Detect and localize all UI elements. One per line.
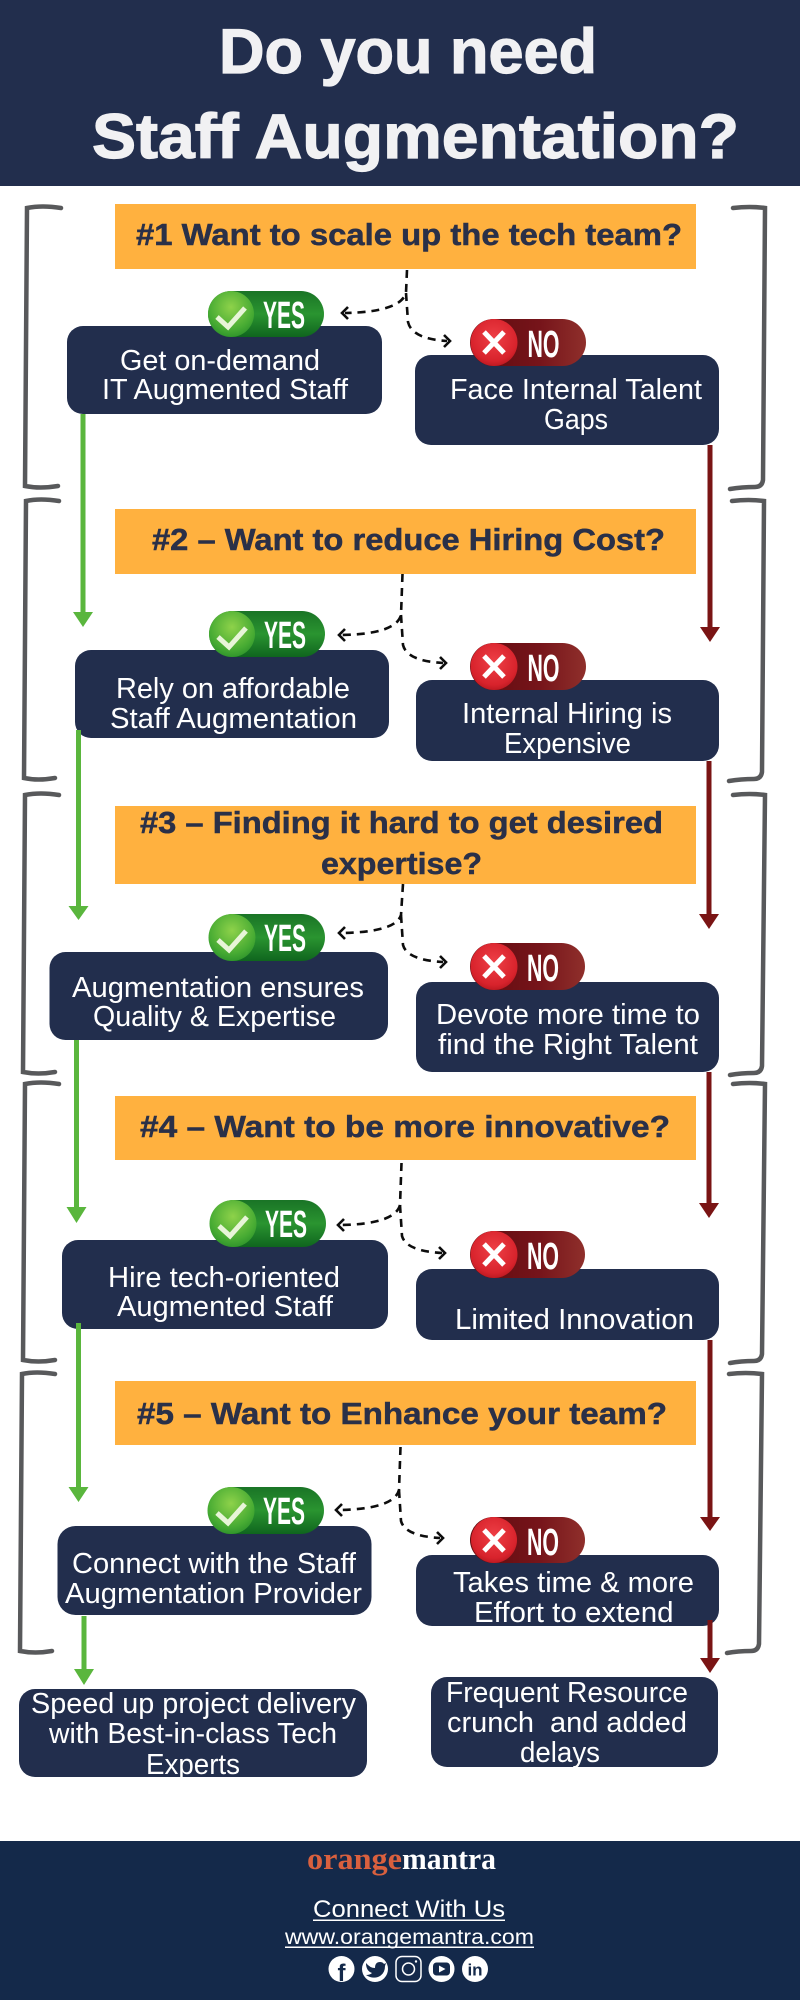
no answer box: Takes time & more: [453, 1567, 694, 1599]
panel: question 1: [25, 204, 765, 642]
no pill: [470, 1231, 585, 1278]
icon: linkedin: in: [467, 1960, 483, 1980]
red arrow: [700, 1340, 720, 1531]
no answer box: Expensive: [504, 728, 631, 760]
icon: twitter: [362, 1956, 388, 1982]
yes answer box: Staff Augmentation: [110, 703, 357, 735]
panel: question 4: [23, 1082, 765, 1531]
no pill: NO: [527, 948, 559, 990]
bracket pair: [24, 500, 764, 781]
question box: #1 Want to scale up the tech team?: [136, 217, 682, 252]
no pill: NO: [527, 1236, 559, 1278]
logo: mantra: [402, 1841, 496, 1876]
no answer box: [416, 680, 719, 761]
dashed branch arrows: [339, 574, 446, 669]
question box: [115, 204, 696, 269]
header panel: [0, 0, 800, 186]
red arrow: [700, 1620, 720, 1673]
panel: question 2: [24, 500, 764, 929]
yes pill: [209, 611, 325, 657]
no answer box: Limited Innovation: [455, 1304, 694, 1336]
website link: www.orangemantra.com: [284, 1926, 534, 1949]
outcome: yes path: Speed up project delivery: [31, 1688, 357, 1720]
yes answer box: [67, 326, 382, 414]
no pill: NO: [528, 324, 560, 366]
question box: [115, 805, 696, 884]
no answer box: Devote more time to: [436, 999, 700, 1031]
green arrow: [68, 1323, 88, 1502]
yes pill: YES: [263, 1491, 305, 1533]
yes pill: YES: [264, 918, 306, 960]
no answer box: Effort to extend: [474, 1597, 674, 1629]
no pill: NO: [528, 648, 560, 690]
question box: expertise?: [321, 846, 482, 881]
bracket pair: [25, 206, 765, 489]
green arrow: [73, 414, 93, 627]
connect heading: Connect With Us: [313, 1896, 505, 1923]
yes pill: YES: [263, 295, 305, 337]
icon: linkedin: [462, 1956, 488, 1982]
yes pill: [210, 1200, 326, 1247]
outcome: no path: crunch and added: [447, 1707, 687, 1739]
title: [92, 17, 739, 172]
dashed branch arrows: [342, 270, 450, 347]
question box: [115, 1381, 696, 1445]
title: Do you need: [219, 17, 597, 87]
question box: #2 – Want to reduce Hiring Cost?: [152, 522, 665, 557]
no answer box: Gaps: [544, 404, 608, 436]
no answer box: [415, 355, 719, 445]
yes answer box: [62, 1240, 388, 1329]
title: Staff Augmentation?: [92, 102, 739, 172]
no answer box: [416, 1555, 719, 1629]
bracket pair: [23, 794, 765, 1075]
yes answer box: Connect with the Staff: [72, 1548, 356, 1580]
yes pill: YES: [265, 1204, 307, 1246]
outcome: no path: Frequent Resource: [446, 1677, 688, 1709]
green arrow: [66, 1040, 86, 1223]
logo: orange: [307, 1841, 402, 1876]
no pill: [470, 1517, 585, 1564]
yes pill: YES: [264, 615, 306, 657]
footer panel: [0, 1841, 800, 2000]
no answer box: [416, 982, 719, 1072]
panel: question 5: [20, 1372, 762, 1685]
yes answer box: Augmentation ensures: [72, 972, 364, 1004]
yes answer box: Augmentation Provider: [65, 1578, 363, 1610]
no pill: [470, 643, 586, 690]
red arrow: [700, 445, 720, 642]
outcome: yes path: [19, 1688, 367, 1781]
yes answer box: Rely on affordable: [116, 673, 350, 705]
icon: facebook: f: [338, 1960, 346, 1987]
no pill: NO: [527, 1522, 559, 1564]
question box: [115, 1096, 696, 1160]
icon: instagram: [396, 1956, 421, 1982]
bracket pair: [20, 1372, 762, 1653]
icon: facebook: [328, 1956, 354, 1987]
green arrow: [68, 730, 88, 920]
question box: #4 – Want to be more innovative?: [140, 1109, 670, 1144]
yes answer box: Quality & Expertise: [93, 1001, 336, 1033]
yes answer box: IT Augmented Staff: [102, 374, 348, 406]
yes answer box: Augmented Staff: [117, 1291, 333, 1323]
yes answer box: Get on-demand: [120, 345, 320, 377]
yes pill: [208, 1487, 324, 1534]
no answer box: Internal Hiring is: [462, 698, 672, 730]
no answer box: Face Internal Talent: [450, 374, 702, 406]
outcome: yes path: Experts: [146, 1749, 240, 1781]
question box: #5 – Want to Enhance your team?: [137, 1396, 667, 1431]
yes pill: [208, 291, 324, 337]
red arrow: [699, 761, 719, 929]
no answer box: find the Right Talent: [438, 1029, 698, 1061]
no pill: [470, 319, 586, 366]
yes pill: [208, 914, 325, 961]
yes answer box: Hire tech-oriented: [108, 1262, 340, 1294]
outcome: no path: [431, 1677, 718, 1769]
outcome: yes path: with Best-in-class Tech: [48, 1718, 337, 1750]
no pill: [470, 943, 585, 990]
no answer box: [416, 1269, 719, 1340]
yes answer box: [58, 1526, 372, 1615]
dashed branch arrows: [338, 1163, 445, 1259]
green arrow: [74, 1616, 94, 1685]
panel: question 3: [23, 794, 765, 1223]
dashed branch arrows: [336, 1447, 443, 1544]
question box: [115, 509, 696, 574]
dashed branch arrows: [339, 884, 446, 968]
icon: youtube: [428, 1956, 454, 1982]
yes answer box: [75, 650, 389, 738]
yes answer box: [50, 952, 388, 1040]
outcome: no path: delays: [520, 1737, 600, 1769]
question box: #3 – Finding it hard to get desired: [140, 805, 663, 840]
social icons: [328, 1956, 488, 1987]
bracket pair: [23, 1082, 765, 1363]
red arrow: [699, 1072, 719, 1218]
